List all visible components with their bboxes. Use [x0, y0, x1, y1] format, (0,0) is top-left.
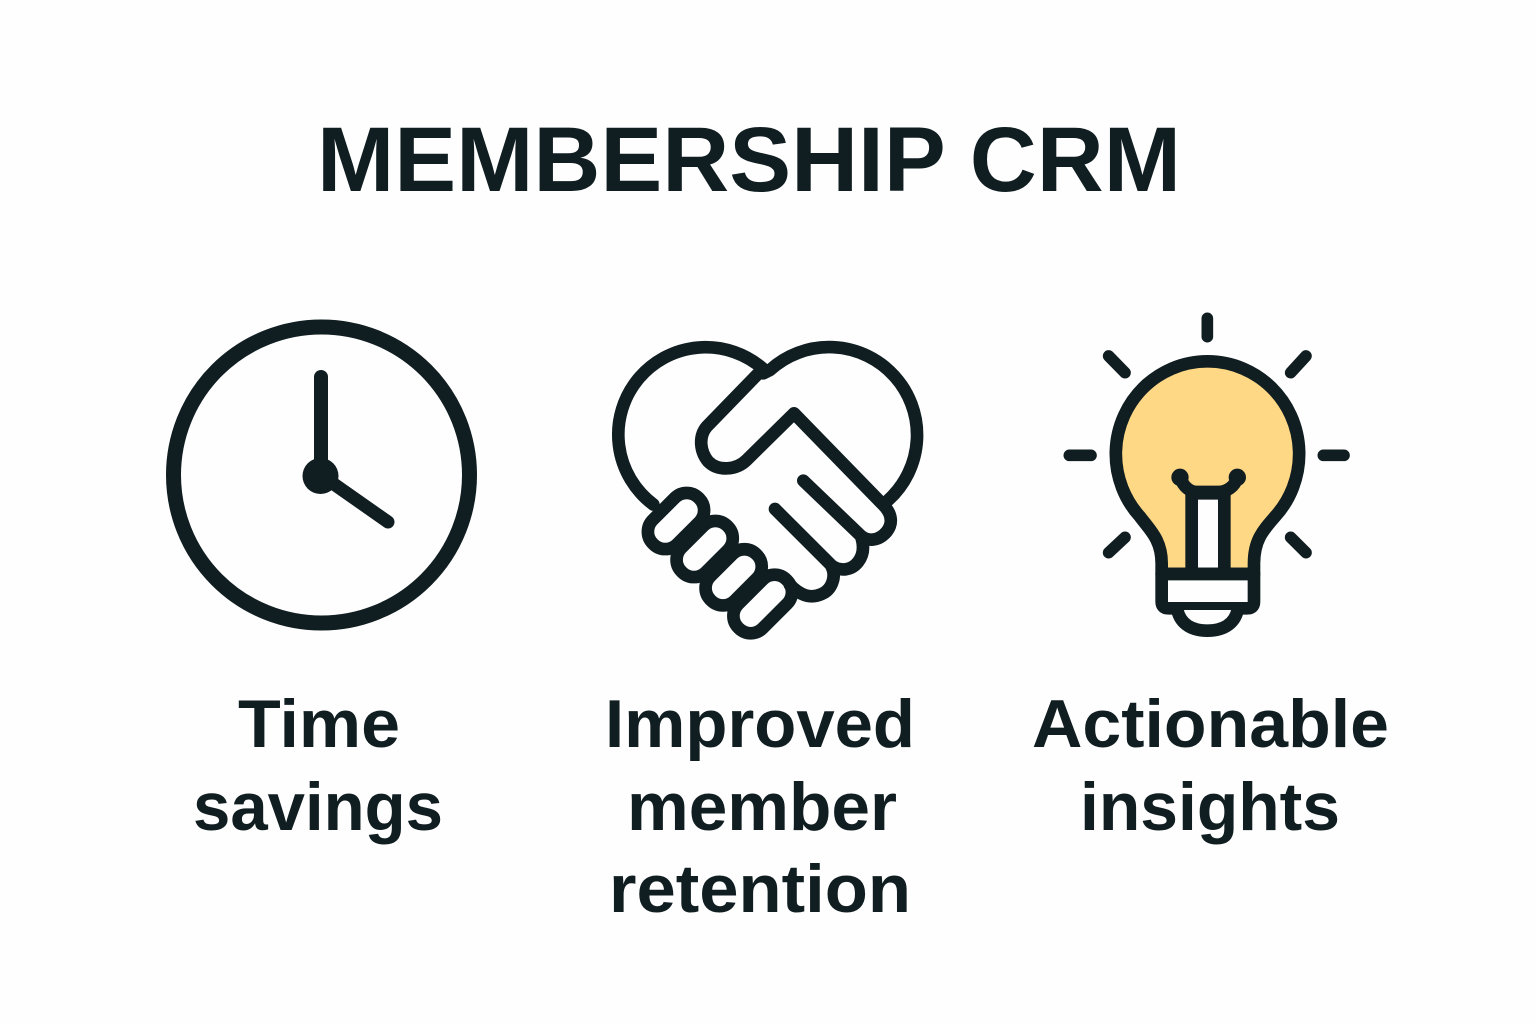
label: improved member retention: Improved — [605, 686, 915, 762]
label: improved member retention: member — [627, 769, 897, 845]
label: time savings — [193, 686, 443, 845]
icon: handshake heart — [618, 347, 917, 640]
label: actionable insights: insights — [1080, 769, 1340, 845]
label: actionable insights: Actionable — [1032, 686, 1389, 762]
label: improved member retention — [605, 686, 915, 927]
label: time savings: Time — [238, 686, 400, 762]
title: MEMBERSHIP CRM — [317, 109, 1181, 211]
label: actionable insights — [1032, 686, 1389, 845]
icon: clock — [174, 327, 470, 623]
icon: light bulb — [1069, 318, 1344, 631]
label: time savings: savings — [193, 769, 443, 845]
label: improved member retention: retention — [609, 851, 911, 927]
